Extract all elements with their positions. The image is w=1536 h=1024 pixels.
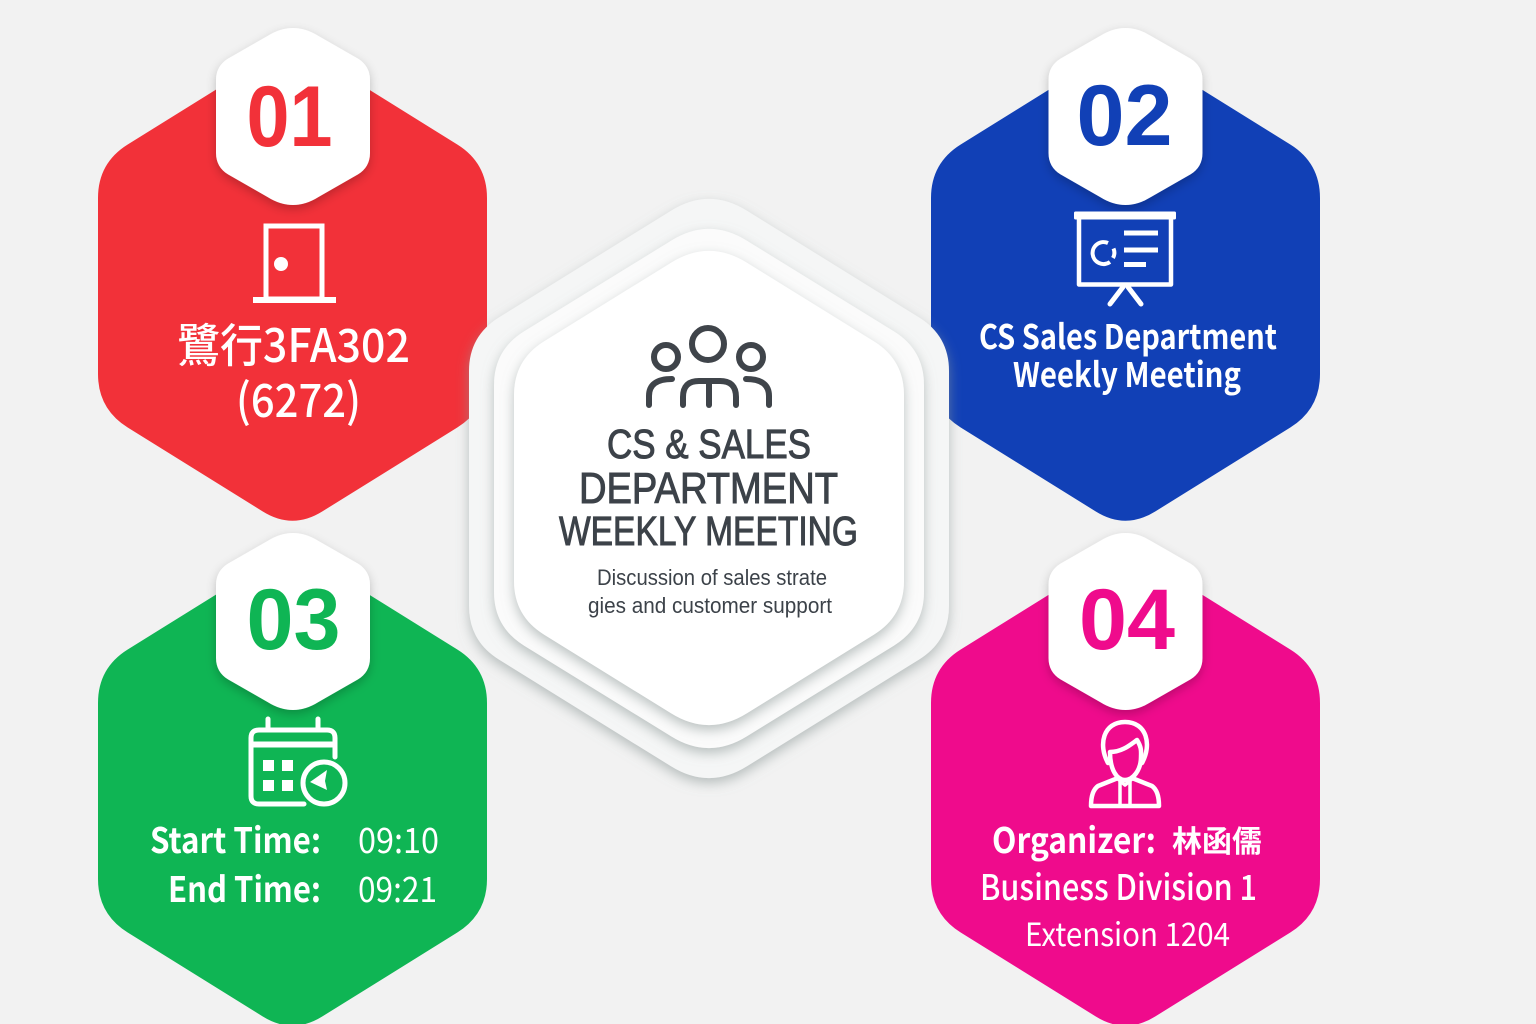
panel: 02 meeting name bbox=[931, 28, 1320, 521]
badge: 04 bbox=[1048, 533, 1202, 710]
panel: center title hexagon bbox=[469, 199, 949, 778]
title bbox=[559, 421, 858, 554]
panel: 04 organizer bbox=[931, 533, 1320, 1024]
badge: 03 bbox=[216, 533, 370, 710]
meeting name text: Weekly Meeting bbox=[1013, 348, 1241, 397]
badge: 02: 02 bbox=[1076, 68, 1172, 164]
description: gies and customer support bbox=[588, 593, 832, 618]
badge: 01: 01 bbox=[246, 69, 332, 165]
organizer text bbox=[980, 813, 1262, 956]
title: DEPARTMENT bbox=[579, 464, 838, 513]
meeting name text: CS Sales Department bbox=[979, 310, 1277, 359]
location text bbox=[177, 310, 410, 431]
time text: 09:10 bbox=[358, 813, 439, 864]
location text: 鷺行3FA302 bbox=[177, 310, 410, 376]
title: CS & SALES bbox=[607, 421, 811, 467]
icon: door bbox=[253, 226, 336, 303]
description: Discussion of sales strate bbox=[597, 565, 827, 590]
organizer text: Extension 1204 bbox=[1025, 910, 1230, 956]
time text: 09:21 bbox=[358, 862, 437, 913]
badge: 04: 04 bbox=[1079, 572, 1175, 668]
icon: person bbox=[1091, 722, 1159, 806]
badge: 02 bbox=[1048, 28, 1202, 205]
organizer text: 林函儒 bbox=[1172, 817, 1262, 861]
description bbox=[588, 565, 832, 618]
meeting name text bbox=[979, 310, 1277, 397]
panel: 03 time bbox=[98, 533, 487, 1024]
time text bbox=[150, 813, 439, 913]
icon: three people bbox=[649, 328, 769, 405]
panel: 01 location bbox=[98, 28, 487, 521]
badge: 01 bbox=[216, 28, 370, 205]
time text: End Time: bbox=[168, 862, 321, 913]
title: WEEKLY MEETING bbox=[559, 508, 858, 554]
organizer text: Business Division 1 bbox=[980, 860, 1257, 911]
time text: Start Time: bbox=[150, 813, 321, 864]
location text: (6272) bbox=[236, 365, 361, 431]
badge: 03: 03 bbox=[246, 572, 340, 668]
icon: calendar and clock bbox=[251, 719, 345, 804]
icon: presentation board bbox=[1074, 212, 1176, 304]
organizer text: Organizer: bbox=[992, 813, 1156, 864]
